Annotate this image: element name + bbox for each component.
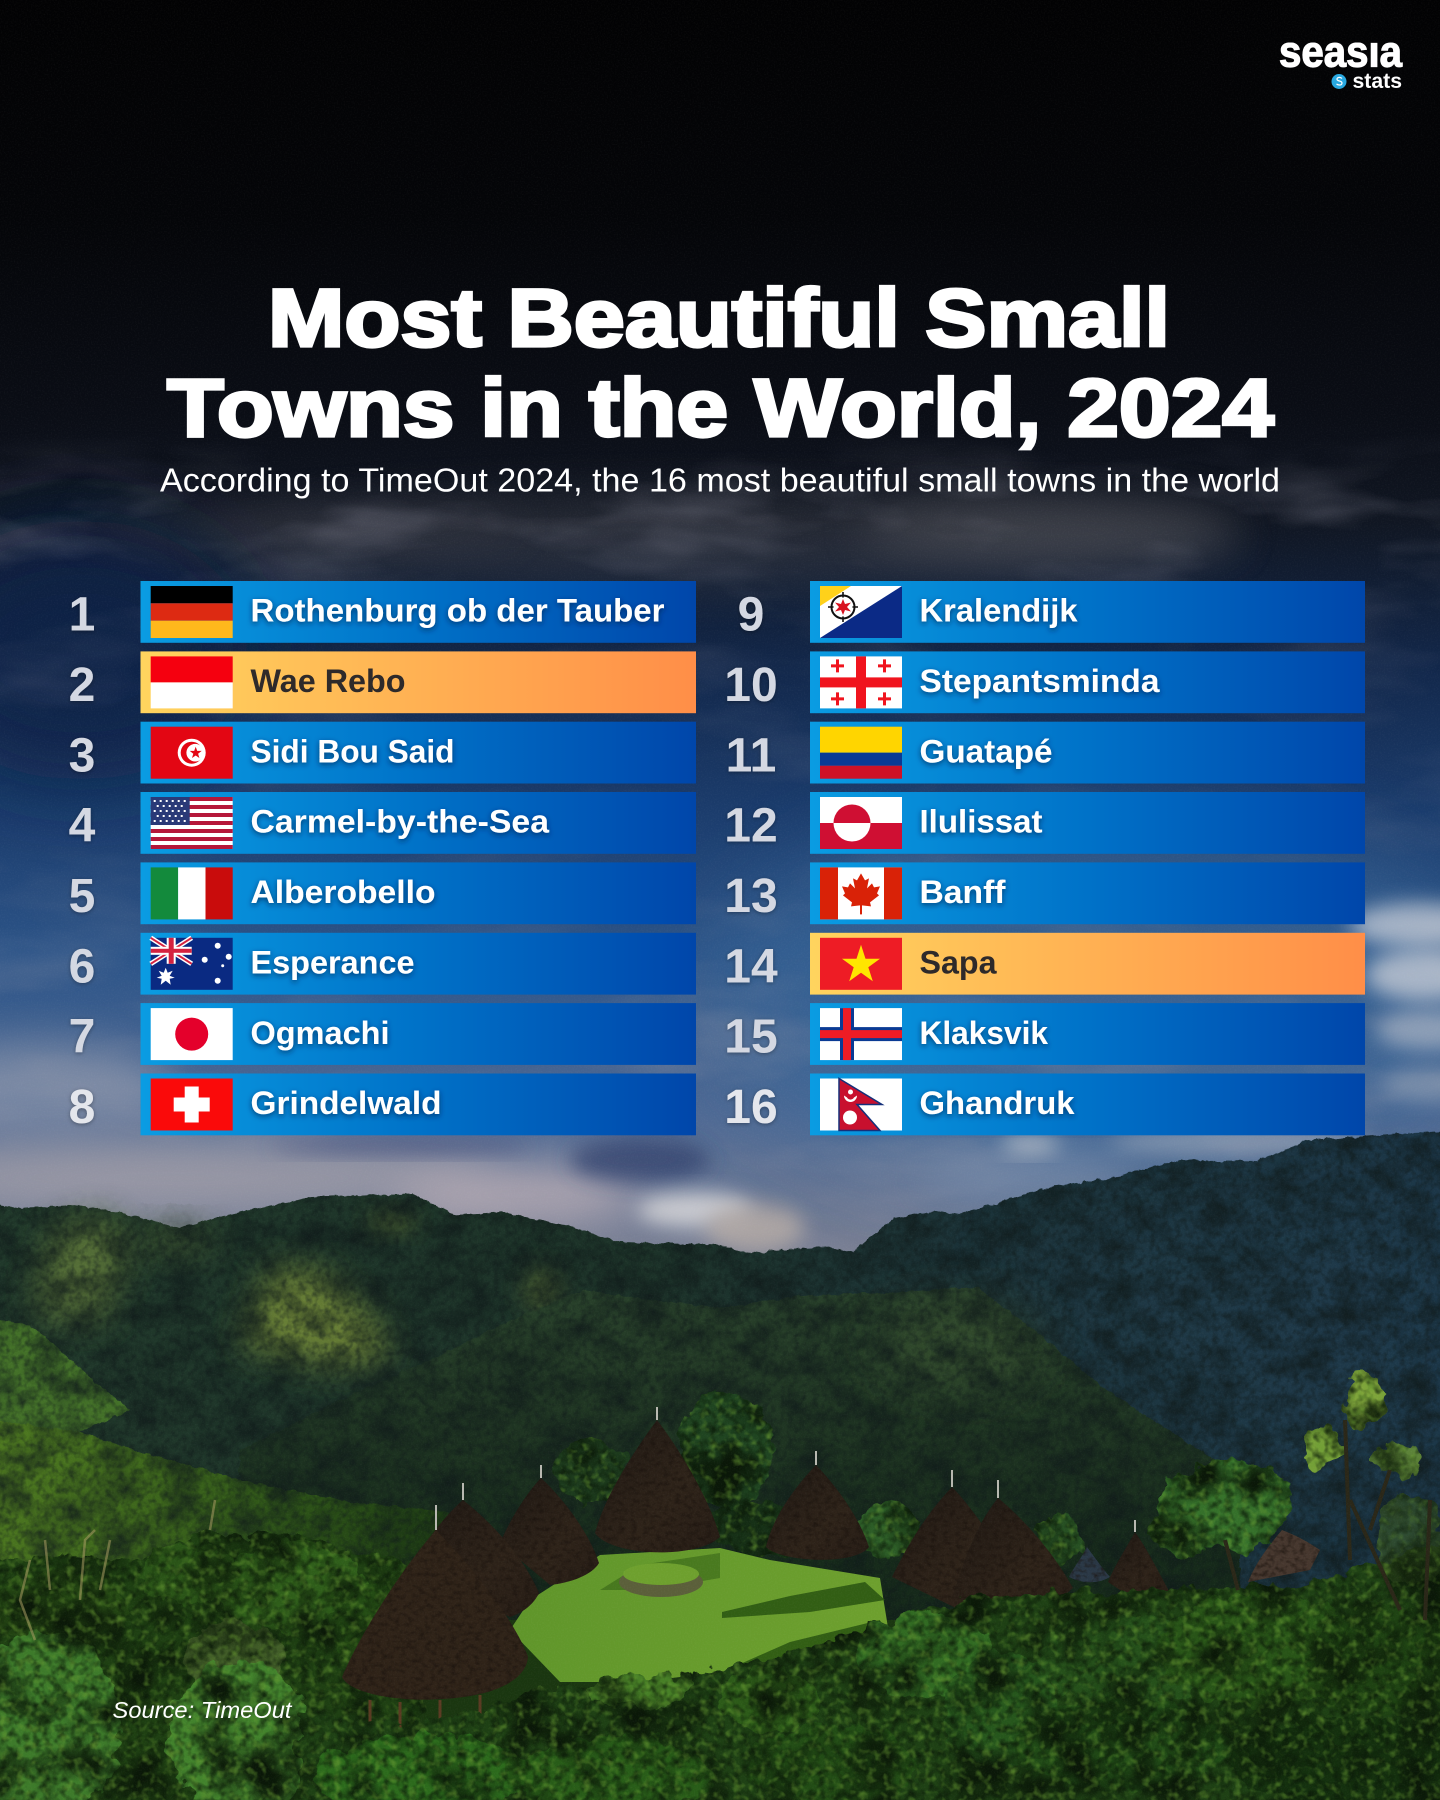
background: trees behind huts [554,1390,1082,1568]
row 16: Ghandruk [724,1074,1365,1135]
row 1: Rothenburg ob der Tauber [69,581,696,643]
ranking column: 9 to 16 [724,581,1365,1135]
row 1: Rothenburg ob der Tauber: 1 [69,588,95,642]
row 11: Guatapé: Guatapé [920,733,1052,769]
row 1: Rothenburg ob der Tauber: Rothenburg ob der Tauber [250,593,664,629]
background: mountains [0,1130,1440,1660]
row 3: Sidi Bou Said: Sidi Bou Said [250,733,454,769]
row 7: Ogmachi [69,1003,696,1065]
row 5: Alberobello [69,862,696,924]
logo: seasia stats: stats [1352,70,1402,93]
background: left trees [0,1535,440,1800]
row 16: Ghandruk: Ghandruk [920,1085,1075,1121]
subtitle: According to TimeOut 2024, the 16 most beautiful small towns in the world [160,462,1280,498]
row 13: Banff: Banff [920,874,1006,910]
row 13: Banff: 13 [724,870,778,923]
row 8: Grindelwald: 8 [69,1081,95,1134]
title: Towns in the World, 2024 [167,363,1274,454]
row 9: Kralendijk [738,581,1365,643]
row 11: Guatapé [726,722,1365,784]
background: right-hand trees [1150,1374,1440,1586]
row 10: Stepantsminda: Stepantsminda [920,663,1160,699]
row 9: Kralendijk: 9 [738,588,764,642]
row 7: Ogmachi: Ogmachi [250,1015,390,1051]
row 2: Wae Rebo: Wae Rebo [250,663,406,699]
title: Most Beautiful Small [268,273,1170,364]
row 6: Esperance [69,933,696,995]
row 7: Ogmachi: 7 [69,1011,95,1064]
row 4: Carmel-by-the-Sea: 4 [69,800,96,853]
background: ground beneath huts [0,1620,1440,1800]
row 14: Sapa [724,933,1365,995]
background: front foliage [300,1540,1440,1800]
row 2: Wae Rebo: 2 [69,659,95,712]
title [167,273,1274,454]
row 12: Ilulissat: Ilulissat [920,804,1043,840]
background: far huts [410,1420,1320,1625]
row 14: Sapa: Sapa [920,944,997,980]
row 10: Stepantsminda: 10 [724,659,778,712]
row 4: Carmel-by-the-Sea: Carmel-by-the-Sea [250,804,549,840]
row 15: Klaksvik: Klaksvik [920,1015,1048,1051]
background: bare branches [20,1500,215,1640]
background: hut stilts and spires [370,1407,1135,1730]
row 6: Esperance: 6 [69,940,95,993]
logo: seasia stats: seasia [1279,28,1402,76]
row 5: Alberobello: Alberobello [250,874,436,910]
background: tree trunks [1225,1420,1430,1620]
row 8: Grindelwald: Grindelwald [250,1085,442,1121]
row 11: Guatapé: 11 [726,729,776,782]
row 5: Alberobello: 5 [69,870,95,923]
background: sky and clouds [0,217,1440,1254]
background: stone ring [619,1563,703,1597]
background: meadow [510,1548,890,1682]
row 2: Wae Rebo [69,651,696,713]
row 3: Sidi Bou Said [69,722,696,784]
row 8: Grindelwald [69,1074,696,1135]
source note: Source: TimeOut [112,1697,293,1723]
row 9: Kralendijk: Kralendijk [920,593,1078,629]
background: large hut in front [342,1530,528,1700]
row 4: Carmel-by-the-Sea [69,792,696,854]
row 3: Sidi Bou Said: 3 [69,729,95,782]
logo: seasia stats [1280,42,1403,89]
row 14: Sapa: 14 [724,940,778,993]
row 16: Ghandruk: 16 [724,1081,778,1134]
row 12: Ilulissat: 12 [724,800,778,853]
row 15: Klaksvik [724,1003,1365,1065]
row 13: Banff [724,862,1365,924]
row 6: Esperance: Esperance [250,944,414,980]
ranking column: 1 to 8 [69,581,696,1135]
row 12: Ilulissat [724,792,1365,854]
row 10: Stepantsminda [724,651,1365,713]
row 15: Klaksvik: 15 [724,1011,778,1064]
background: meadow shadows [600,1553,885,1672]
